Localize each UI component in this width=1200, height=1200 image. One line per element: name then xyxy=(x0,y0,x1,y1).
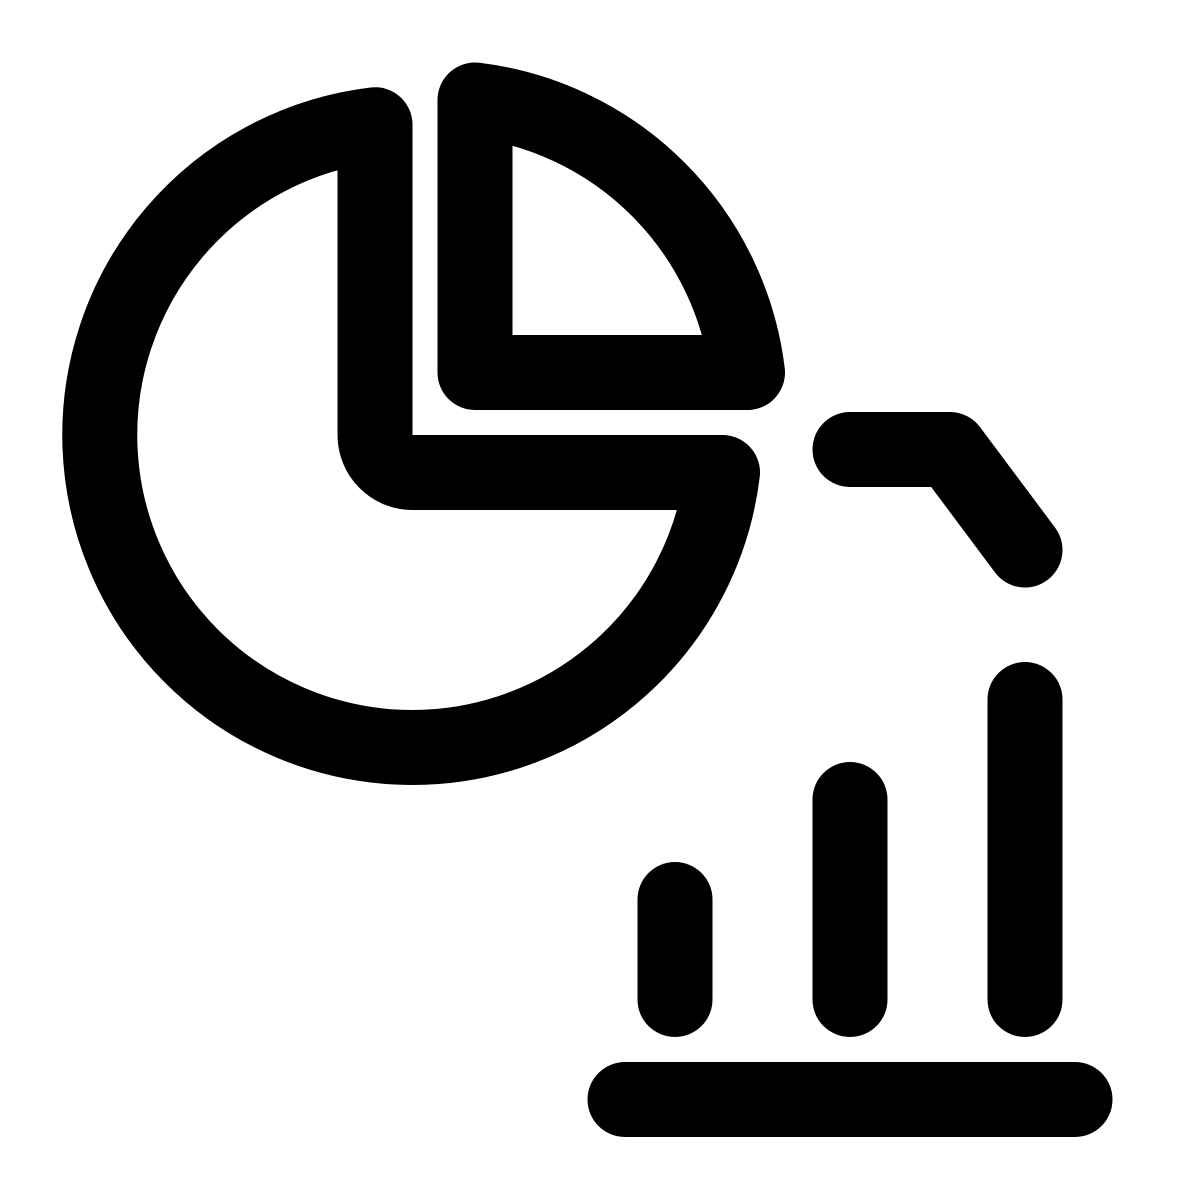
icon: pie chart slice xyxy=(475,100,748,372)
icon: baseline xyxy=(625,1062,1075,1137)
icon: bar medium xyxy=(812,800,888,1000)
icon: pie chart body xyxy=(100,125,722,747)
icon: bar short xyxy=(638,900,712,1000)
icon: bar tall xyxy=(988,700,1062,1000)
icon: trend line xyxy=(850,450,1025,550)
